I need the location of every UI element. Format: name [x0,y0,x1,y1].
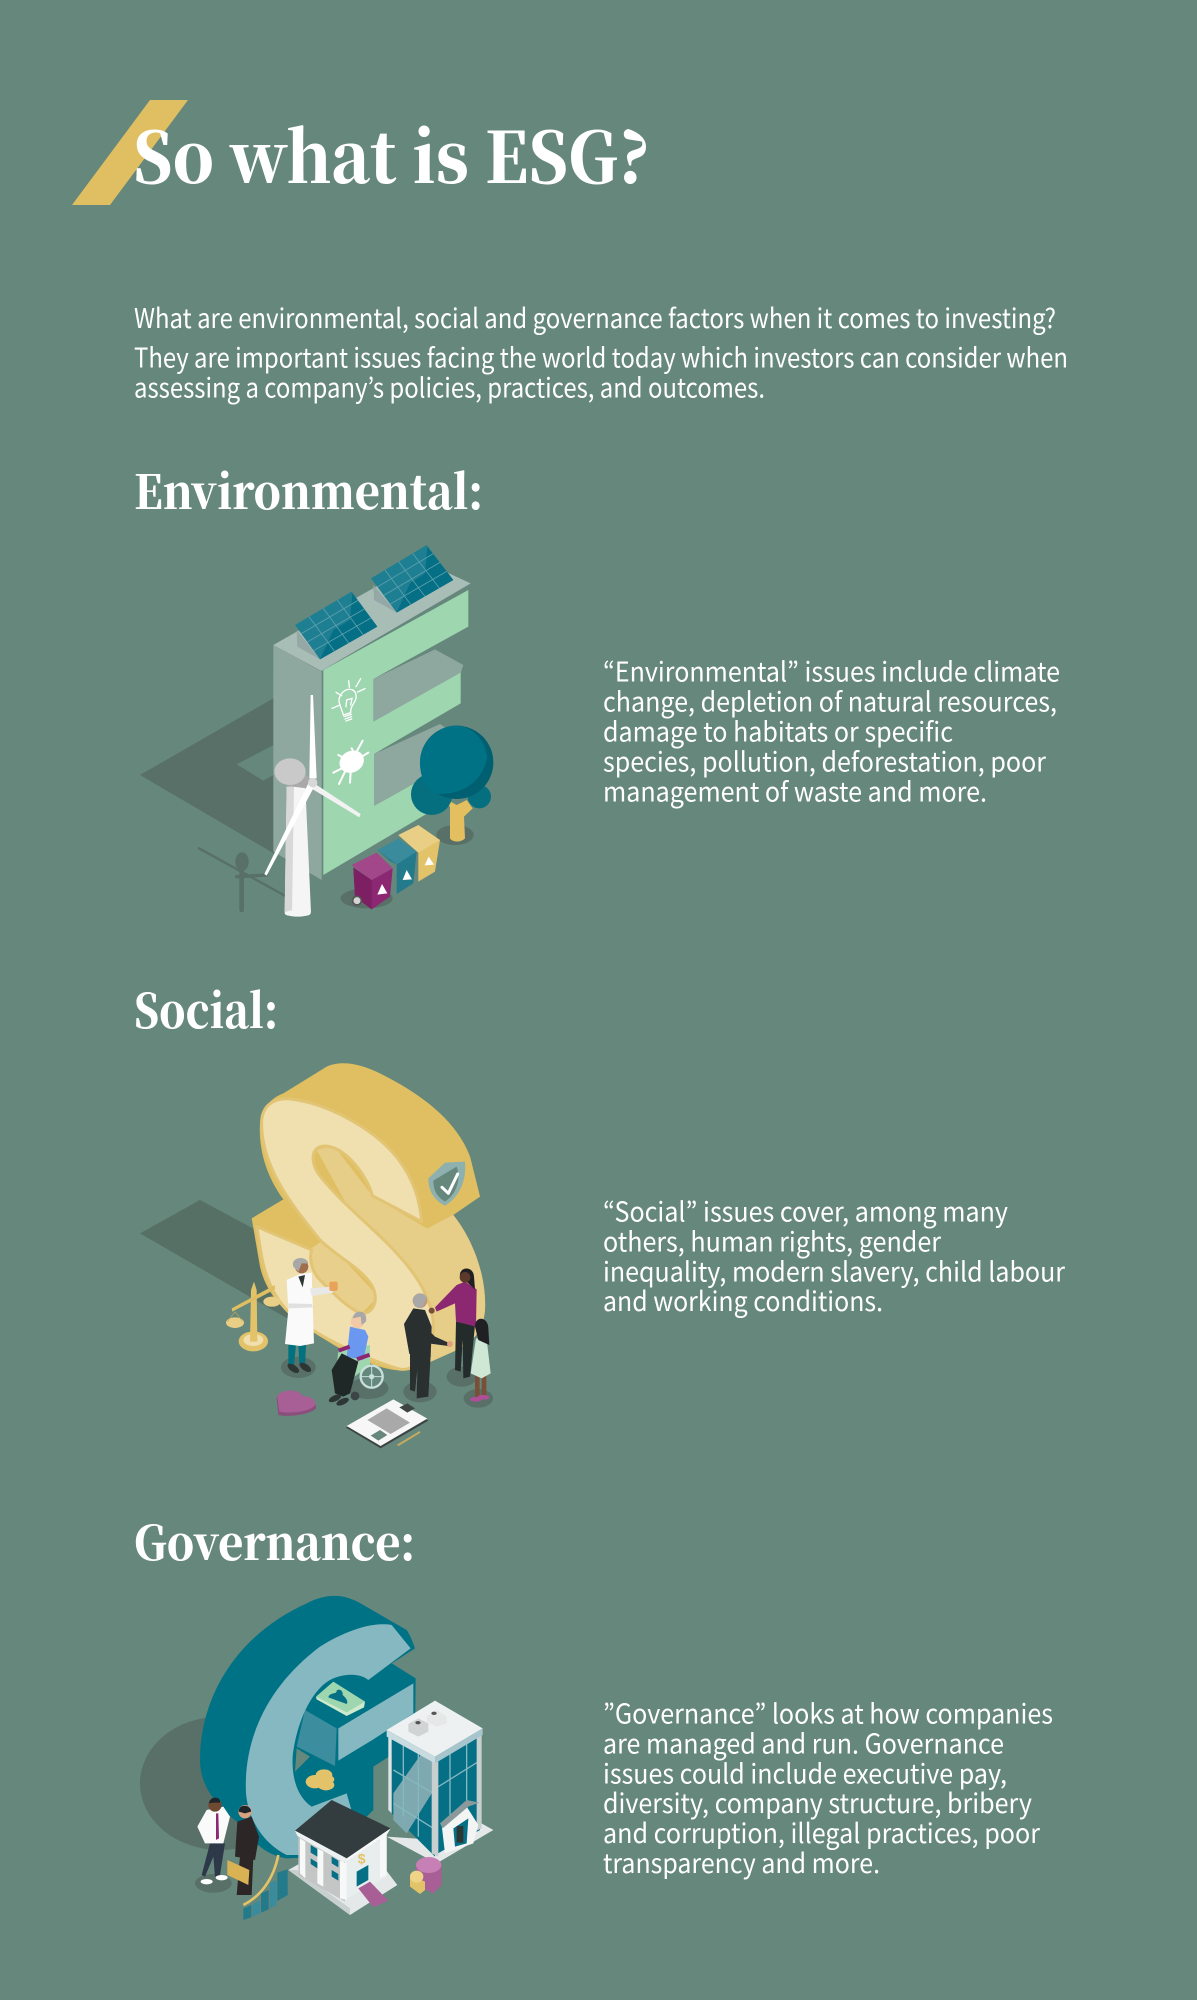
person: doctor [281,1258,338,1378]
person: man in white shirt [195,1798,232,1893]
tree [411,726,493,845]
icon: sun [333,741,368,784]
text: social description [603,1190,1065,1319]
S shadow [140,1200,293,1320]
person: man in suit with briefcase [227,1805,259,1895]
icon: light bulb [332,679,365,721]
G shadow [140,1717,300,1850]
person: girl [464,1319,493,1408]
S top edge over tip [372,1157,480,1228]
E front face [323,590,468,875]
text: environmental description: damage to habitats or specific [603,710,953,750]
title accent slash [72,100,188,205]
bar chart with growth arrow [243,1855,288,1920]
heading: governance: Governance: [134,1507,415,1574]
recycling bins [341,825,440,909]
text: governance description: and corruption, illegal practices, poor [603,1812,1040,1851]
scales of justice [226,1282,281,1351]
building side [273,645,322,880]
small entrance building [440,1800,479,1853]
text: governance description [603,1692,1053,1881]
text: governance description: issues could include executive pay, [603,1752,1007,1792]
text: social description: “Social” issues cover, among many [603,1190,1008,1230]
S extrusion [252,1063,485,1371]
intro text: assessing a company’s policies, practices, and outcomes. [134,366,765,406]
pie chart cylinder [410,1857,442,1894]
intro text [134,297,1068,406]
bank building: $ [358,1850,366,1866]
G front face [246,1624,411,1855]
text: environmental description: management of waste and more. [603,770,987,810]
building shadow [140,698,277,855]
G bar front face [338,1683,413,1761]
S inner surfaces [317,1145,485,1367]
text: environmental description: “Environmental” issues include climate [603,650,1060,690]
G bar inner face [297,1710,337,1766]
wind turbine [264,695,361,917]
illustration: letter S with people [140,1063,493,1448]
G extrusion [200,1596,416,1858]
E notches [373,649,463,722]
icon: coins [306,1769,334,1790]
text: environmental description: change, depletion of natural resources, [603,680,1057,720]
icon: shield [428,1162,465,1206]
bank building [288,1800,397,1915]
text: governance description: are managed and run. Governance [603,1722,1004,1762]
illustration: letter G with buildings [140,1596,493,1920]
person: man in suit [403,1293,453,1402]
title: So what is ESG? [133,103,650,204]
S front face [257,1099,433,1369]
text: governance description: ”Governance” looks at how companies [603,1692,1053,1732]
text: governance description: transparency and more. [603,1842,880,1881]
text: governance description: diversity, company structure, bribery [603,1782,1032,1821]
solar panels [295,545,453,659]
text: social description: and working conditions. [603,1280,883,1319]
person: woman in wheelchair [328,1312,388,1407]
heading: environmental: Environmental: [134,456,483,523]
turbine shadow [199,848,287,910]
office tower [387,1701,493,1863]
intro text: What are environmental, social and governance factors when it comes to investing? [134,297,1056,336]
text: environmental description [603,650,1060,810]
icon: heart [277,1390,316,1416]
roof [273,561,471,671]
intro text: They are important issues facing the world today which investors can consider when [134,336,1068,376]
icon: banknotes [316,1682,365,1716]
text: social description: others, human rights, gender [603,1220,941,1260]
illustration: letter E building [140,545,493,917]
text: environmental description: species, pollution, deforestation, poor [603,740,1046,780]
heading: social: Social: [134,975,278,1042]
text: social description: inequality, modern slavery, child labour [603,1250,1065,1290]
document on clipboard [346,1399,428,1448]
G inner wall gap [295,1748,310,1772]
person: woman in purple [429,1269,477,1387]
